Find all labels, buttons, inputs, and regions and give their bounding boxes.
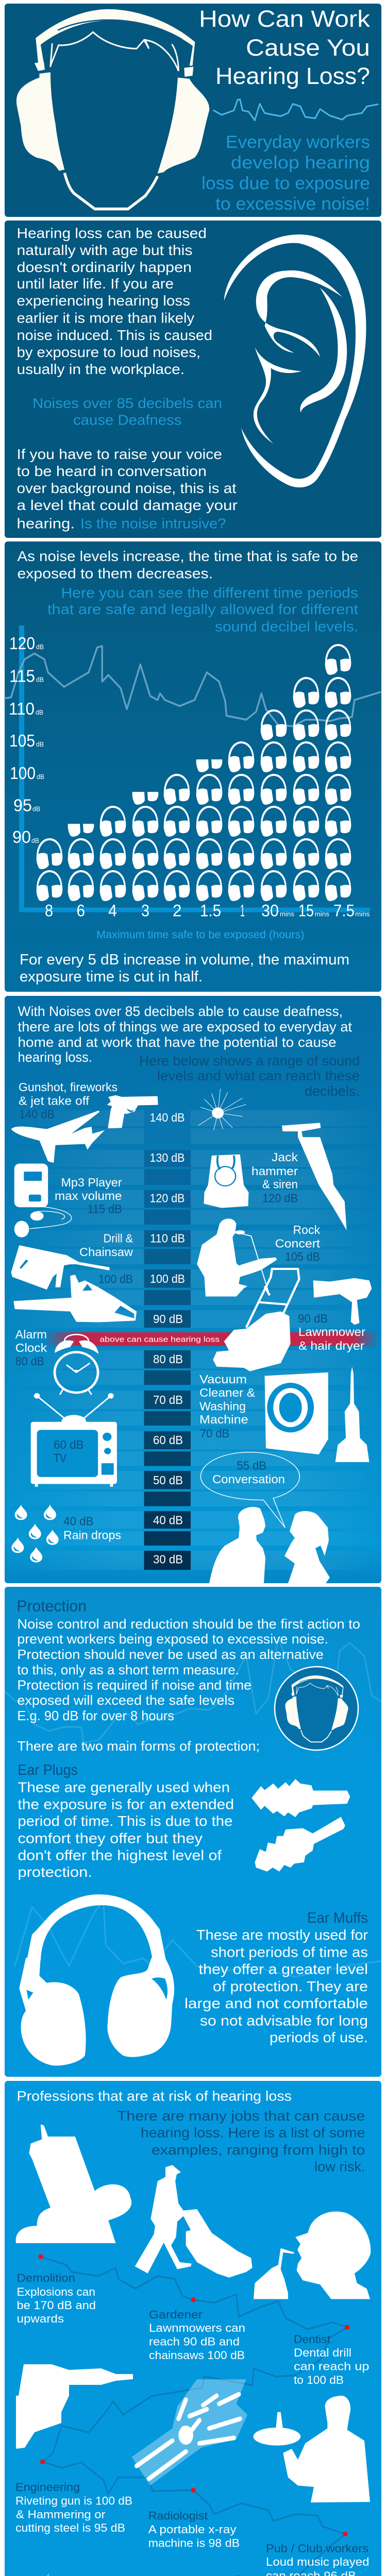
profession: dentist: can reach up: [294, 2360, 369, 2373]
sound source labels: 140 dB: [19, 1108, 55, 1121]
text: ear plugs: the exposure is for an extended: [18, 1797, 234, 1812]
profession: radiologist: [148, 2510, 240, 2549]
icon: television: [31, 1393, 117, 1487]
decibel scale labels: 40 dB: [153, 1514, 183, 1527]
sound source labels: 40 dB: [63, 1515, 94, 1528]
decibel scale labels: 110 dB: [150, 1232, 185, 1245]
text: ear plugs: protection.: [18, 1864, 92, 1880]
decibel scale labels: 90 dB: [153, 1312, 183, 1326]
centre decibel column: [144, 1110, 191, 1570]
x axis time labels: 8: [45, 902, 53, 920]
heading: protection: Protection: [16, 1597, 87, 1615]
icon: chainsaw: [13, 1275, 137, 1323]
text: protection guidance: to this, only as a short term measure.: [17, 1662, 239, 1677]
x axis title: Maximum time safe to be exposed (hours): [96, 929, 304, 941]
text: protection guidance: There are two main forms of protection;: [17, 1738, 260, 1754]
icon: siren: [204, 1155, 248, 1208]
panel: professions at risk: [5, 2081, 381, 2576]
icons: two people talking: [209, 1507, 330, 1583]
blue intro text: [47, 585, 358, 635]
text: protection guidance: Noise control and reduction should be the first action to: [17, 1616, 360, 1632]
text: 5 dB rule: [20, 952, 349, 985]
sound wave: [214, 99, 378, 121]
sound source labels: & siren: [262, 1178, 298, 1191]
text: causes of hearing loss: naturally with age but this: [16, 242, 193, 258]
icon: rock singer: [197, 1218, 277, 1297]
text: ear muffs: of protection. They are: [213, 1978, 368, 1994]
connecting route lines: [38, 2257, 347, 2576]
icon: lawnmower: [213, 1269, 299, 1371]
panel: protection: [5, 1587, 381, 2077]
sound source labels: 115 dB: [88, 1202, 122, 1216]
band: above can cause hearing loss: [44, 1332, 379, 1346]
y axis decibel labels: dB: [37, 773, 44, 781]
icon: tractor: [11, 2573, 129, 2576]
sound source labels: [15, 1080, 365, 1541]
sound source labels: & hair dryer: [298, 1339, 364, 1352]
sound source labels: Drill &: [104, 1232, 133, 1245]
text: protection guidance: prevent workers being exposed to excessive noise.: [17, 1631, 328, 1647]
sound source labels: Chainsaw: [79, 1245, 133, 1259]
x axis time labels: [45, 902, 370, 920]
icon: firework burst: [198, 1089, 246, 1130]
y axis decibel labels: 95: [13, 795, 32, 815]
text: causes of hearing loss: doesn't ordinarily happen: [16, 259, 192, 275]
subtitle: to excessive noise!: [215, 194, 370, 214]
profession: dentist: Dental drill: [294, 2346, 351, 2359]
profession: engineering: [15, 2481, 132, 2534]
sound source labels: Lawnmower: [298, 1325, 365, 1338]
blue intro text: sound decibel levels.: [215, 618, 358, 635]
y axis decibel labels: 100: [10, 764, 36, 783]
icon: gardener with lawnmower: [135, 2165, 253, 2278]
y axis decibel labels: dB: [36, 676, 44, 683]
text: ear muffs: [184, 1927, 368, 2045]
blue intro text: Here you can see the different time periods: [61, 585, 358, 601]
profession: engineering: cutting steel is 95 dB: [15, 2521, 125, 2534]
icon: alarm clock: [55, 1334, 98, 1395]
text: ear plugs: don't offer the highest level of: [18, 1848, 222, 1863]
profession: demolition: [16, 2272, 96, 2325]
icon: plane: [11, 1111, 105, 1163]
panel: safe exposure times: [5, 541, 381, 992]
sound source labels: Rock: [293, 1223, 320, 1236]
heading: ear plugs: Ear Plugs: [18, 1762, 78, 1778]
text: protection guidance: E.g. 90 dB for over 8 hours: [17, 1708, 174, 1723]
sound source labels: 60 dB: [54, 1438, 83, 1451]
intro text: there are lots of things we are exposed to everyday at: [18, 1019, 352, 1035]
subtitle: [202, 132, 370, 214]
sound source labels: 105 dB: [285, 1250, 320, 1263]
band: above can cause hearing loss: above can cause hearing loss: [100, 1335, 220, 1344]
red location dots: [35, 2254, 349, 2576]
x axis time labels: 6: [76, 902, 85, 920]
profession: demolition: Demolition: [16, 2272, 75, 2284]
x axis time labels: mins: [314, 910, 330, 918]
text: ear muffs: short periods of time as: [211, 1944, 368, 1960]
text: raising your voice: to be heard in conversation: [16, 463, 207, 479]
text: causes of hearing loss: usually in the workplace.: [16, 361, 184, 377]
profession: demolition: be 170 dB and: [16, 2299, 96, 2312]
scale bands: [5, 1110, 381, 1570]
icons: demolition, gardener, dentist: [16, 2125, 371, 2299]
decibel scale labels: [149, 1111, 185, 1566]
decibel scale labels: 30 dB: [153, 1553, 183, 1566]
profession: engineering: & Hammering or: [16, 2508, 105, 2521]
y axis decibel labels: 120: [9, 634, 35, 653]
profession: demolition: upwards: [16, 2312, 64, 2325]
sound source labels: Alarm: [15, 1328, 47, 1341]
text: raising your voice: [16, 446, 238, 532]
sound source labels: Conversation: [212, 1472, 285, 1486]
decibel scale labels: 130 dB: [149, 1151, 184, 1164]
text: ear plugs: [18, 1780, 234, 1880]
title: Hearing Loss?: [215, 63, 370, 89]
text: ear muffs: These are mostly used for: [196, 1927, 368, 1943]
text: ear plugs: These are generally used when: [18, 1780, 230, 1795]
sound source labels: 90 dB: [298, 1312, 328, 1325]
text: causes of hearing loss: noise induced. This is caused: [16, 327, 212, 343]
sound source labels: & jet take off: [19, 1094, 90, 1108]
decibel scale labels: 50 dB: [153, 1473, 183, 1487]
sound source labels: Vacuum: [199, 1372, 247, 1386]
profession: gardener: [149, 2308, 245, 2362]
profession: pub and club workers: Pub / Club workers: [266, 2542, 368, 2555]
sound source labels: Mp3 Player: [61, 1176, 122, 1189]
y axis decibel labels: dB: [31, 837, 39, 844]
title: How Can Work: [199, 6, 371, 32]
profession: gardener: Lawnmowers can: [149, 2321, 245, 2334]
text: protection guidance: Protection should never be used as an alternative: [17, 1647, 324, 1662]
y axis decibel labels: [9, 634, 44, 846]
subtitle: Everyday workers: [226, 132, 370, 152]
speech bubble: [200, 1452, 299, 1528]
icons: rain drops: [11, 1504, 59, 1563]
text: ear plugs: period of time. This is due to the: [18, 1813, 232, 1829]
icon: jack hammer: [282, 1123, 347, 1230]
sound source labels: 80 dB: [15, 1354, 44, 1368]
x axis time labels: 7.5: [333, 902, 355, 920]
intro text: hearing loss.: [18, 1049, 92, 1065]
text: professions intro: examples, ranging from high to: [152, 2142, 365, 2158]
dark intro text: levels and what can reach these: [157, 1068, 360, 1083]
text: 5 dB rule: exposure time is cut in half.: [20, 969, 203, 985]
icons: mp3, drill, chainsaw, singer, mower, dryer, clock, TV, washer, vacuum, drops: [11, 1163, 372, 1563]
profession: dentist: Dentist: [294, 2333, 330, 2346]
text: raising your voice: over background noise, this is at: [16, 480, 237, 496]
decibel scale labels: 100 dB: [150, 1272, 185, 1285]
icon: gun: [107, 1095, 158, 1128]
y axis decibel labels: dB: [36, 740, 44, 748]
icon: head wearing ear defenders: [16, 9, 209, 209]
y axis decibel labels: 115: [9, 667, 35, 685]
icon: hair dryer: [313, 1278, 372, 1325]
callout: noises over 85 decibels: cause Deafness: [73, 412, 181, 428]
title: Cause You: [246, 35, 370, 61]
text: causes of hearing loss: experiencing hearing loss: [16, 293, 190, 309]
dark intro text: decibels.: [305, 1083, 360, 1099]
decibel scale labels: 80 dB: [153, 1352, 183, 1366]
intro text: [18, 1004, 352, 1065]
x axis time labels: 1: [240, 902, 245, 920]
text: protection guidance: Protection is required if noise and time: [17, 1677, 251, 1693]
text: professions intro: hearing loss. Here is a list of some: [141, 2125, 365, 2141]
x axis time labels: 15: [298, 902, 314, 920]
icon: riveting gun: [16, 2364, 133, 2449]
callout: noises over 85 decibels: [32, 395, 222, 428]
intro text: home and at work that have the potential to cause: [18, 1035, 337, 1050]
dark intro text: Here below shows a range of sound: [139, 1053, 360, 1069]
sound source labels: Clock: [15, 1341, 47, 1354]
icons: gun, plane, fireworks, jack hammer, siren: [11, 1089, 347, 1230]
title: [199, 6, 371, 89]
icon: ear plugs: [251, 1779, 350, 1872]
text: professions intro: There are many jobs that can cause: [117, 2108, 365, 2124]
icons: x-ray, waiter, tractor, orchestra, factory: [11, 2379, 370, 2576]
sound source labels: Gunshot, fireworks: [19, 1080, 118, 1094]
y axis decibel labels: dB: [32, 805, 40, 813]
decibel scale labels: 70 dB: [153, 1393, 183, 1406]
heading: professions: Professions that are at risk of hearing loss: [16, 2089, 292, 2104]
y axis decibel labels: 105: [9, 731, 35, 750]
icon: demolition tower: [16, 2125, 131, 2243]
decibel scale labels: 60 dB: [153, 1433, 183, 1447]
y axis decibel labels: dB: [36, 643, 44, 651]
sound source labels: Concert: [275, 1236, 321, 1250]
profession: radiologist: machine is 98 dB: [148, 2536, 240, 2549]
sound source labels: Jack: [272, 1150, 298, 1164]
x axis time labels: 2: [173, 902, 181, 920]
heading: ear muffs: Ear Muffs: [307, 1910, 368, 1926]
profession: dentist: [294, 2333, 369, 2386]
profession: pub and club workers: Loud music played: [266, 2555, 369, 2568]
text: ear muffs: so not advisable for long: [200, 2013, 368, 2029]
sound source labels: Cleaner &: [199, 1386, 255, 1399]
subtitle: loss due to exposure: [202, 174, 370, 193]
text: protection guidance: exposed will exceed the safe levels: [17, 1692, 234, 1708]
x axis time labels: 3: [141, 902, 149, 920]
text: raising your voice: If you have to raise your voice: [16, 446, 222, 462]
sound source labels: hammer: [251, 1164, 298, 1178]
profession: dentist: to 100 dB: [294, 2374, 344, 2386]
sound source labels: 55 dB: [237, 1459, 266, 1472]
text: ear muffs: large and not comfortable: [184, 1995, 368, 2011]
icon: x-ray hand: [132, 2379, 247, 2485]
y axis decibel labels: 110: [9, 699, 35, 718]
intro text: As noise levels increase, the time that is safe to be: [18, 548, 358, 564]
text: ear muffs: periods of use.: [270, 2029, 368, 2045]
callout: noises over 85 decibels: Noises over 85 decibels can: [32, 395, 222, 411]
icon: drill: [11, 1245, 110, 1290]
sound wave over chart: [5, 646, 380, 726]
text: raising your voice: a level that could damage your: [16, 497, 238, 513]
sound source labels: 70 dB: [200, 1427, 229, 1440]
intro text: With Noises over 85 decibels able to cause deafness,: [18, 1004, 343, 1019]
text: raising your voice: hearing.: [16, 515, 75, 532]
panel: hearing loss causes: [5, 221, 381, 538]
icon: mp3 player: [14, 1163, 72, 1238]
text: causes of hearing loss: Hearing loss can be caused: [16, 225, 207, 241]
profession: radiologist: Radiologist: [148, 2510, 208, 2522]
sound source labels: max volume: [55, 1189, 122, 1202]
y axis decibel labels: dB: [36, 708, 43, 716]
pictogram chart: ear defenders per exposure time: [37, 644, 351, 901]
sound source labels: TV: [54, 1451, 67, 1465]
text: ear muffs: they offer a greater level: [199, 1961, 368, 1977]
chart axes: [19, 625, 370, 912]
sound source labels: Rain drops: [63, 1528, 121, 1541]
profession: gardener: reach 90 dB and: [149, 2335, 240, 2348]
x axis time labels: mins: [280, 910, 295, 918]
panel: sound level scale: [5, 996, 381, 1583]
text: protection guidance: [17, 1616, 360, 1754]
y axis decibel labels: 90: [12, 827, 31, 846]
text: professions intro: low risk.: [314, 2159, 365, 2175]
text: causes of hearing loss: by exposure to loud noises,: [16, 344, 200, 360]
dark intro text: [139, 1053, 360, 1099]
icon: ear: [224, 234, 366, 487]
icon: vacuum cleaner: [335, 1367, 370, 1462]
text: raising your voice: Is the noise intrusive?: [80, 515, 226, 532]
text: causes of hearing loss: [16, 225, 212, 377]
x axis time labels: 4: [108, 902, 117, 920]
intro text: exposed to them decreases.: [18, 566, 213, 581]
text: causes of hearing loss: earlier it is more than likely: [16, 310, 194, 326]
sound source labels: 120 dB: [262, 1191, 298, 1205]
profession: demolition: Explosions can: [16, 2285, 95, 2298]
icon: dentist patient and drill: [254, 2212, 371, 2299]
faint sound waves: [5, 1638, 381, 1977]
sound source labels: Machine: [199, 1413, 248, 1426]
x axis time labels: mins: [355, 910, 370, 918]
profession: engineering: Engineering: [15, 2481, 80, 2494]
text: 5 dB rule: For every 5 dB increase in volume, the maximum: [20, 952, 349, 968]
icon: washing machine: [265, 1372, 328, 1454]
decibel scale labels: 140 dB: [149, 1111, 184, 1124]
subtitle: develop hearing: [231, 153, 370, 173]
profession: pub and club workers: [266, 2542, 369, 2576]
icon: ear protection sign: [275, 1667, 358, 1750]
sound source labels: 100 dB: [98, 1273, 133, 1286]
text: causes of hearing loss: until later life. If you are: [16, 276, 174, 292]
profession: engineering: Riveting gun is 100 dB: [15, 2495, 132, 2507]
x axis time labels: 1.5: [200, 902, 221, 920]
text: ear plugs: comfort they offer but they: [18, 1830, 203, 1846]
icon: ear muffs: [19, 1894, 174, 2065]
profession: gardener: Gardener: [149, 2308, 203, 2321]
blue intro text: that are safe and legally allowed for different: [47, 601, 358, 617]
panel: title header: [5, 4, 381, 217]
profession: gardener: chainsaws 100 dB: [149, 2349, 245, 2362]
profession: radiologist: A portable x-ray: [148, 2523, 237, 2536]
intro text: [18, 548, 358, 581]
sound source labels: Washing: [199, 1399, 246, 1413]
text: professions intro: [117, 2108, 365, 2175]
x axis time labels: 30: [261, 902, 279, 920]
icon: waiter with tray: [254, 2396, 370, 2502]
decibel scale labels: 120 dB: [149, 1191, 184, 1205]
